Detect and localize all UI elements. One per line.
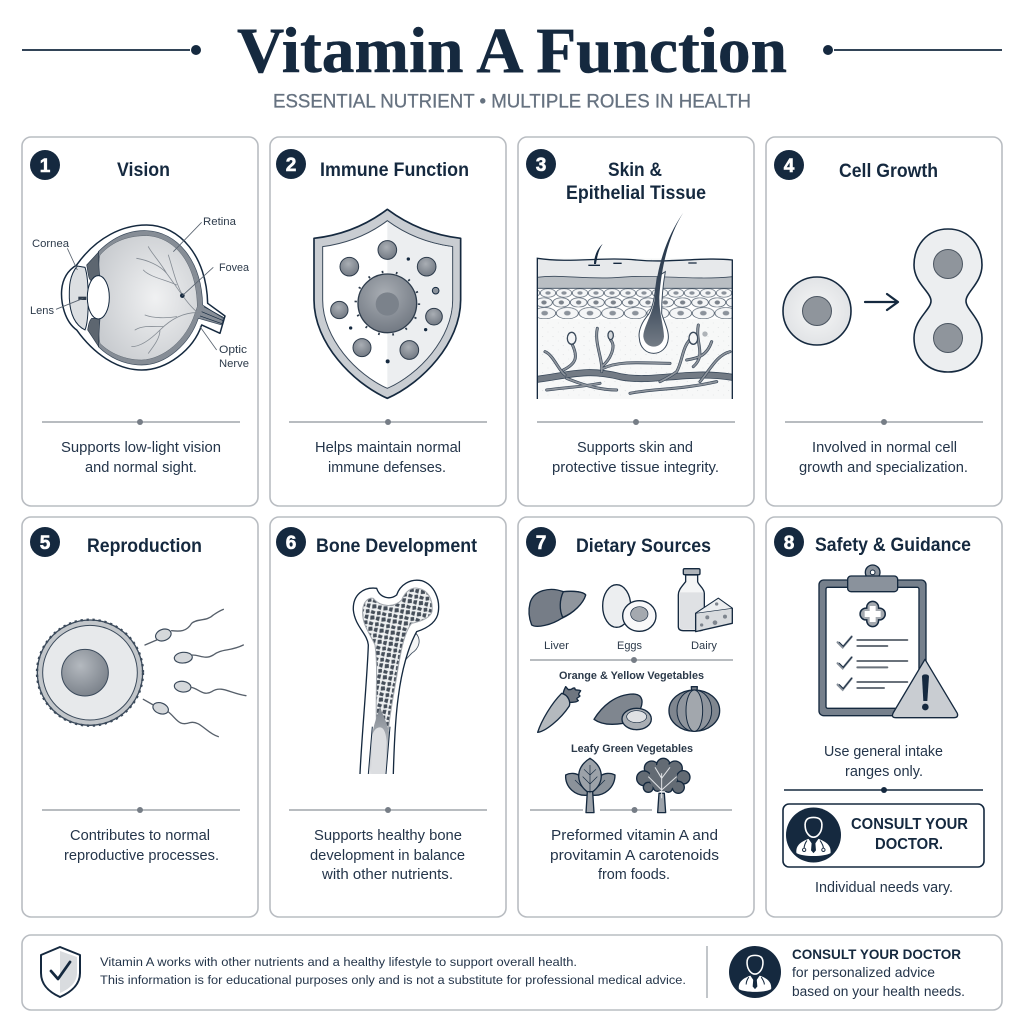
- panel: vision: 1: [40, 156, 51, 177]
- icon: eggs: [603, 585, 656, 631]
- callout text: CONSULT YOUR: [851, 816, 968, 833]
- subheading: leafy green vegetables: Leafy Green Vegetables: [571, 743, 693, 755]
- heading: skin: [566, 160, 706, 204]
- panel: dietary sources: [518, 517, 754, 917]
- icon: clipboard with warning: [819, 565, 958, 718]
- icon: pumpkin: [669, 687, 720, 731]
- panel: safety and guidance: 8: [784, 533, 794, 554]
- eye labels: Nerve: [219, 358, 249, 370]
- icon: sperm cells: [143, 609, 246, 737]
- footer consult text: for personalized advice: [792, 965, 935, 980]
- header: [22, 15, 1002, 112]
- footer panel: [22, 935, 1002, 1010]
- footer consult text: [792, 946, 965, 999]
- icon: femur bone: [353, 580, 439, 774]
- callout text: DOCTOR.: [875, 836, 943, 853]
- description: bone: Supports healthy bone: [314, 828, 462, 844]
- description: immune: [315, 440, 461, 476]
- heading: immune function: Immune Function: [320, 160, 469, 181]
- eye labels: Retina: [203, 216, 237, 228]
- description: vision: [61, 440, 221, 476]
- text: intake guidance: Use general intake: [824, 744, 943, 760]
- icon: kale: [637, 758, 690, 813]
- icon: dividing cell: [914, 229, 982, 372]
- icon: milk and cheese: [678, 569, 732, 632]
- callout: consult your doctor: [783, 804, 984, 867]
- panel: cell growth: [766, 137, 1002, 506]
- panel: skin and epithelial tissue: [518, 137, 754, 506]
- description: bone: [310, 828, 465, 883]
- heading: dietary sources: Dietary Sources: [576, 536, 711, 557]
- food illustrations: [529, 569, 732, 813]
- text: intake guidance: ranges only.: [845, 764, 923, 780]
- description: skin: [552, 440, 719, 476]
- subheading: orange and yellow vegetables: Orange & Yellow Vegetables: [559, 670, 704, 682]
- heading: reproduction: Reproduction: [87, 536, 202, 557]
- description: cell growth: [799, 440, 968, 476]
- footer note: [100, 955, 686, 987]
- panel: reproduction: [22, 517, 258, 917]
- footer consult text: based on your health needs.: [792, 984, 965, 999]
- icon: sweet potato: [594, 694, 651, 730]
- description: dietary: [550, 828, 719, 883]
- description: dietary: Preformed vitamin A and: [551, 828, 718, 844]
- description: dietary: provitamin A carotenoids: [550, 848, 719, 864]
- description: vision: Supports low-light vision: [61, 440, 221, 456]
- description: immune: immune defenses.: [328, 460, 446, 476]
- icon: egg cell: [37, 620, 143, 726]
- description: vision: and normal sight.: [85, 460, 197, 476]
- description: bone: development in balance: [310, 848, 465, 864]
- panel: skin and epithelial tissue: 3: [536, 155, 546, 176]
- icon: doctor small: [729, 946, 781, 998]
- callout text: [851, 816, 968, 853]
- eye labels: Cornea: [32, 238, 70, 250]
- heading: skin: Epithelial Tissue: [566, 183, 706, 204]
- heading: bone development: Bone Development: [316, 536, 478, 557]
- footer note: Vitamin A works with other nutrients and a healthy lifestyle to support overall health.: [100, 955, 577, 969]
- icon: shield with pathogens: [314, 209, 461, 398]
- description: cell growth: Involved in normal cell: [812, 440, 957, 456]
- description: dietary: from foods.: [598, 867, 670, 883]
- description: skin: protective tissue integrity.: [552, 460, 719, 476]
- food labels: Eggs: [617, 640, 642, 652]
- panel: bone development: 6: [286, 533, 296, 554]
- eye labels: [30, 216, 250, 370]
- title: Vitamin A Function: [237, 15, 787, 87]
- eye labels: Optic: [219, 344, 248, 356]
- description: cell growth: growth and specialization.: [799, 460, 968, 476]
- footer consult text: CONSULT YOUR DOCTOR: [792, 946, 961, 962]
- heading: vision: Vision: [117, 160, 170, 181]
- food labels: Liver: [544, 640, 569, 652]
- heading: skin: Skin &: [608, 160, 662, 181]
- eye labels: Fovea: [219, 262, 250, 274]
- food labels: [544, 640, 718, 652]
- right title ornament: [823, 45, 1002, 55]
- description: reproduction: reproductive processes.: [64, 848, 219, 864]
- panel: reproduction: 5: [40, 533, 51, 554]
- panel: safety and guidance: [766, 517, 1002, 917]
- icon: doctor: [786, 808, 841, 862]
- food labels: Dairy: [691, 640, 718, 652]
- panel: bone development: [270, 517, 506, 917]
- subtitle: ESSENTIAL NUTRIENT • MULTIPLE ROLES IN HEALTH: [273, 90, 751, 112]
- eye labels: Lens: [30, 305, 54, 317]
- left title ornament: [22, 45, 201, 55]
- description: immune: Helps maintain normal: [315, 440, 461, 456]
- icon: shield check: [41, 947, 80, 997]
- icon: single cell: [783, 277, 851, 345]
- heading: safety: Safety & Guidance: [815, 535, 971, 556]
- panel: immune function: 2: [286, 155, 296, 176]
- panel: cell growth: 4: [784, 156, 795, 177]
- description: skin: Supports skin and: [577, 440, 693, 456]
- eye diagram: [56, 222, 225, 370]
- panel: dietary sources: 7: [536, 533, 546, 554]
- note: individual needs: Individual needs vary.: [815, 880, 953, 896]
- heading: cell growth: Cell Growth: [839, 161, 938, 182]
- description: bone: with other nutrients.: [321, 867, 453, 883]
- footer note: This information is for educational purposes only and is not a substitute for professional medical advice.: [100, 973, 686, 987]
- skin cross-section: [537, 213, 732, 399]
- text: intake guidance: [824, 744, 943, 780]
- panel: immune function: [270, 137, 506, 506]
- description: reproduction: Contributes to normal: [70, 828, 210, 844]
- panel: vision: [22, 137, 258, 506]
- icon: spinach: [566, 758, 615, 813]
- arrow: [865, 294, 898, 310]
- icon: liver: [529, 589, 586, 626]
- icon: carrot: [538, 687, 581, 732]
- description: reproduction: [64, 828, 219, 864]
